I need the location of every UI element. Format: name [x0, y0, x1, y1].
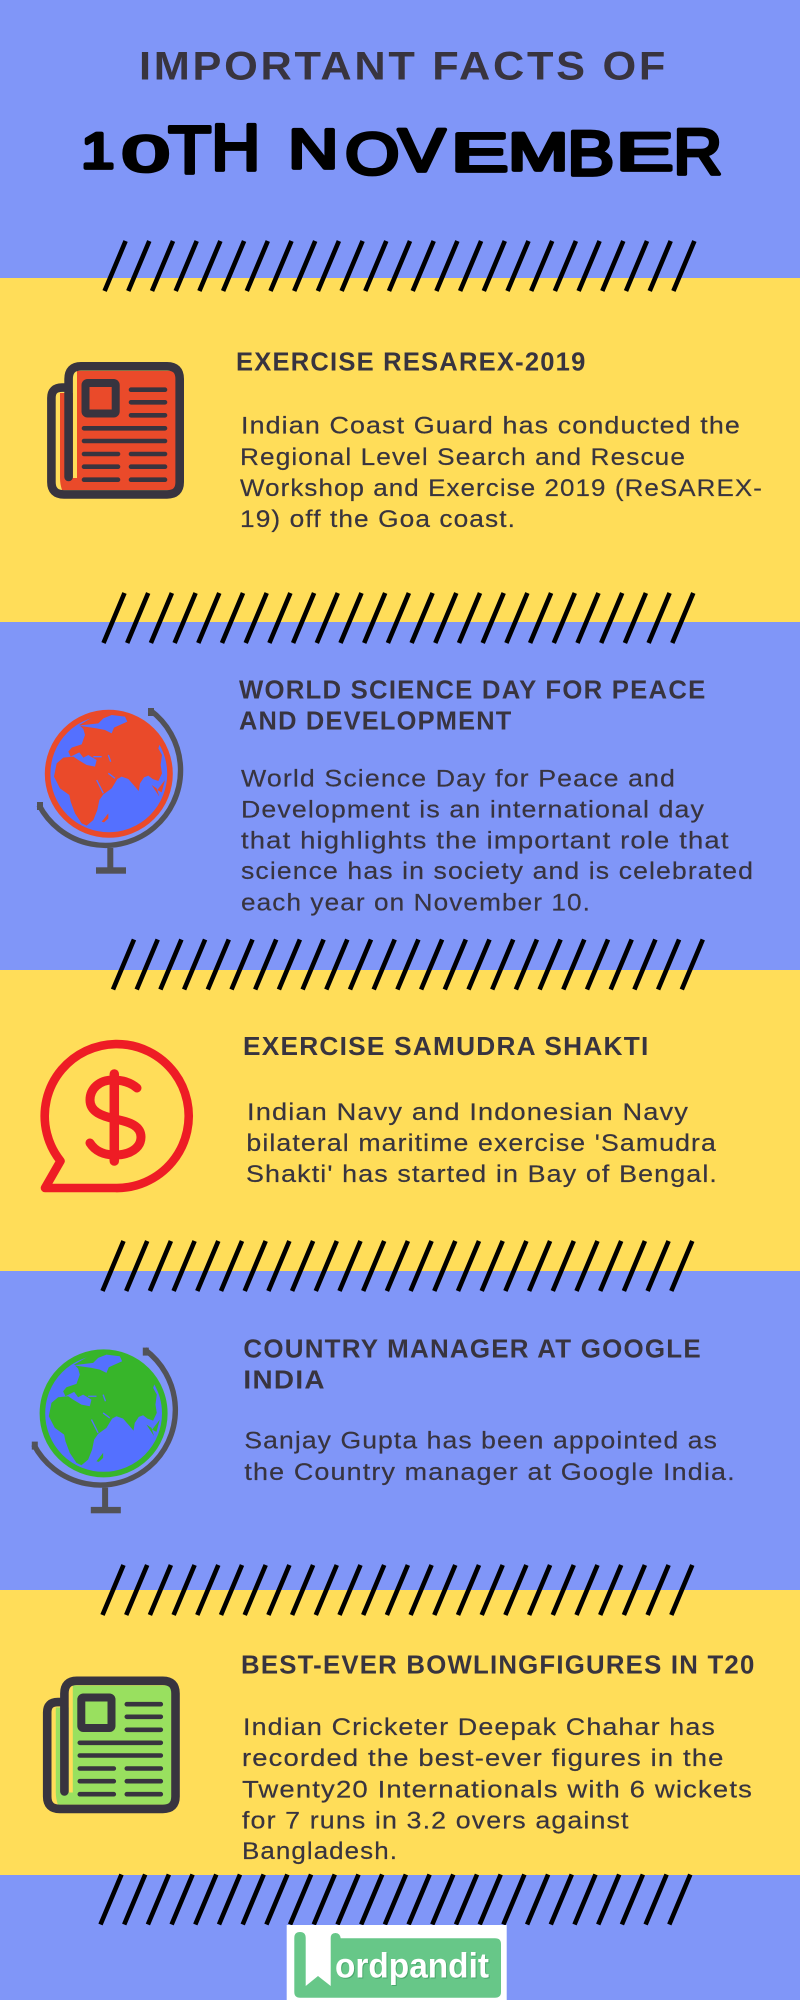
panel: country manager at google india [0, 1271, 800, 1590]
title line: 10th november: 0 [122, 126, 169, 182]
icon: green newspaper [47, 1681, 176, 1809]
logo wordmark: ordpandit [335, 1946, 489, 1985]
title line: 10th november: R [673, 115, 722, 188]
title line: 10th november: H [211, 110, 260, 184]
body text: deepak chahar: recorded the best-ever figures in the [242, 1745, 724, 1772]
body text: deepak chahar: Bangladesh. [242, 1838, 398, 1865]
title line: 10th november: V [398, 117, 445, 184]
body text: world science day: that highlights the important role that [241, 827, 730, 854]
title line: important facts of: IMPORTANT FACTS OF [139, 44, 668, 88]
body text: world science day [241, 765, 754, 916]
body text: samudra shakti: bilateral maritime exercise 'Samudra [246, 1130, 717, 1157]
body text: samudra shakti: Shakti' has started in Bay of Bengal. [246, 1161, 718, 1188]
body text: world science day: World Science Day for Peace and [241, 765, 676, 792]
heading: world science day: AND DEVELOPMENT [239, 707, 512, 735]
panel: header [0, 0, 800, 278]
panel: world science day [0, 622, 800, 970]
icon: red globe [37, 708, 181, 874]
icon: red newspaper [51, 366, 180, 494]
heading: world science day [239, 677, 706, 735]
icon: dollar speech bubble [45, 1044, 189, 1188]
logo: wordpandit [287, 1925, 507, 2000]
title line: 10th november: E [451, 123, 508, 183]
title line: 10th november: B [567, 119, 614, 189]
panel: exercise resarex-2019 [0, 278, 800, 622]
heading: world science day: WORLD SCIENCE DAY FOR PEACE [239, 677, 706, 705]
body text: deepak chahar: Indian Cricketer Deepak Chahar has [243, 1714, 716, 1741]
panel: best-ever bowling figures [0, 1590, 800, 1875]
body text: world science day: Development is an international day [241, 797, 705, 824]
body text: samudra shakti: Indian Navy and Indonesian Navy [247, 1099, 689, 1126]
body text: world science day: science has in society and is celebrated [241, 858, 754, 885]
body text: resarex [240, 412, 763, 533]
body text: deepak chahar: Twenty20 Internationals with 6 wickets [242, 1776, 753, 1803]
body text: samudra shakti [246, 1099, 718, 1188]
body text: resarex: Workshop and Exercise 2019 (ReSAREX- [240, 475, 763, 502]
title line: 10th november: O [345, 122, 399, 187]
heading: country manager at google india: COUNTRY MANAGER AT GOOGLE [243, 1335, 702, 1363]
body text: deepak chahar [242, 1714, 753, 1865]
title line: 10th november: M [508, 123, 568, 182]
heading: exercise resarex-2019: EXERCISE RESAREX-2019 [236, 348, 586, 376]
heading: country manager at google india [243, 1335, 702, 1395]
title line: 10th november: N [288, 117, 338, 180]
title line: 10th november: E [616, 123, 673, 182]
body text: resarex: Regional Level Search and Rescue [240, 444, 686, 471]
body text: resarex: Indian Coast Guard has conducted the [241, 412, 741, 439]
panel: exercise samudra shakti [0, 970, 800, 1271]
title line: 10th november: T [168, 113, 211, 188]
body text: deepak chahar: for 7 runs in 3.2 overs against [242, 1807, 630, 1834]
heading: country manager at google india: INDIA [243, 1367, 326, 1395]
title line: 10th november: 1 [81, 123, 114, 179]
body text: resarex: 19) off the Goa coast. [240, 506, 516, 533]
icon: green globe [32, 1348, 175, 1513]
body text: country manager [244, 1428, 736, 1486]
heading: best-ever bowling figures: BEST-EVER BOWLINGFIGURES IN T20 [241, 1652, 756, 1680]
heading: exercise samudra shakti: EXERCISE SAMUDRA SHAKTI [243, 1033, 650, 1061]
body text: country manager: Sanjay Gupta has been appointed as [244, 1428, 718, 1455]
body text: world science day: each year on November 10. [241, 889, 591, 916]
body text: country manager: the Country manager at Google India. [244, 1459, 736, 1486]
